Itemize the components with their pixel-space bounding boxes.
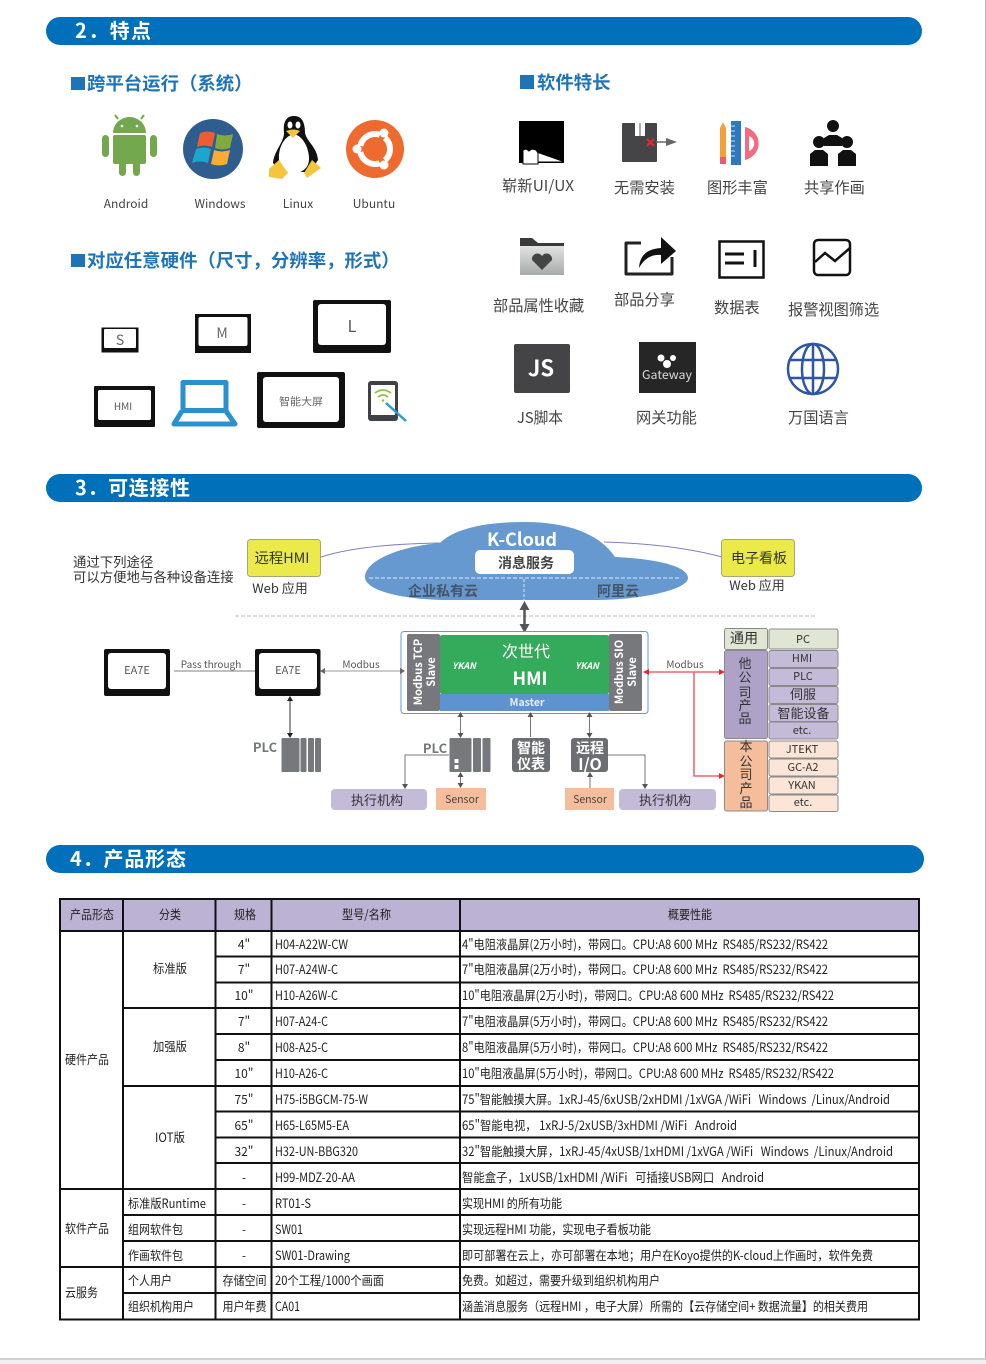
- column: spec: 7": [238, 961, 250, 978]
- column: model: H04-A22W-CW: [275, 934, 348, 953]
- section bar: 2 features: 2．特点: [75, 15, 151, 44]
- column: description: 涵盖消息服务（远程HMI ，电子大屏）所需的【云存储空间+ 数据流量】的相关费用: [462, 1296, 868, 1315]
- label: globe: 万国语言: [788, 406, 849, 428]
- HMI panel: [401, 632, 648, 714]
- column: category: 作画软件包: [128, 1245, 183, 1264]
- link: modbus tcp: [320, 656, 405, 674]
- column: category: 加强版: [153, 1036, 187, 1055]
- heading: cross platform: 跨平台运行（系统）: [87, 70, 253, 96]
- column: description: 8"电阻液晶屏(5万小时)，带网口。CPU:A8 600 MHz RS485/RS232/RS422: [462, 1037, 828, 1056]
- table grid: [60, 899, 919, 1320]
- HMI panel: Modbus SIO: [611, 640, 627, 704]
- column: model: H32-UN-BBG320: [275, 1141, 358, 1160]
- digital signage box: Web 应用: [729, 575, 785, 594]
- column: form: 硬件产品: [65, 1049, 109, 1068]
- remote HMI box: [248, 540, 320, 597]
- column: description: [462, 934, 893, 1315]
- device list: 通用: [730, 628, 758, 648]
- remote IO: I/O: [578, 751, 602, 775]
- column: description: 实现HMI 的所有功能: [462, 1193, 562, 1212]
- column: spec: 75": [234, 1091, 254, 1108]
- table header: 产品形态: [70, 904, 114, 923]
- icon: no install: [622, 123, 677, 162]
- icon: JS: JS: [528, 351, 554, 383]
- HMI panel: YKAN: [575, 659, 600, 672]
- heading: any hardware: 对应任意硬件（尺寸，分辨率，形式）: [87, 247, 400, 273]
- icon: share: [626, 237, 676, 274]
- column: description: 32"智能触摸大屏，1xRJ-45/4xUSB/1xHDMI /1xVGA /WiFi Windows /Linux/Android: [462, 1141, 893, 1160]
- column: spec: 4": [238, 936, 250, 953]
- platform labels: Android: [104, 195, 148, 212]
- column: model: H10-A26-C: [275, 1063, 328, 1082]
- device list: 伺服: [790, 684, 816, 703]
- platform labels: Linux: [283, 195, 313, 212]
- EA7E left: EA7E: [124, 662, 150, 678]
- device list: 公: [739, 751, 753, 770]
- EA7E left: [104, 649, 170, 696]
- device S: [102, 328, 138, 352]
- actuator left: [331, 789, 427, 810]
- platform labels: Windows: [194, 195, 246, 212]
- arrow: EA7E to PLC: [287, 696, 293, 738]
- arrowheads: [402, 712, 648, 789]
- digital signage box: [722, 540, 794, 594]
- column: description: 智能盒子，1xUSB/1xHDMI /WiFi 可插接USB网口 Android: [462, 1167, 764, 1186]
- column: category: 个人用户: [128, 1270, 172, 1289]
- device list: GC-A2: [788, 759, 818, 775]
- remote IO: [571, 738, 608, 775]
- icon: Ubuntu: [346, 120, 404, 178]
- sensor left: Sensor: [445, 792, 480, 807]
- device list: PLC: [793, 668, 813, 684]
- table header: [60, 899, 919, 931]
- device list: JTEKT: [786, 741, 819, 757]
- device list: 品: [738, 708, 752, 727]
- device list: etc.: [793, 722, 811, 738]
- column: description: 实现远程HMI 功能，实现电子看板功能: [462, 1219, 651, 1238]
- column: form: 软件产品: [65, 1218, 109, 1237]
- label: alarm chart: 报警视图筛选: [788, 298, 879, 320]
- connector lines to cloud: [321, 542, 722, 557]
- smart meter: 仪表: [517, 754, 545, 774]
- column: description: 4"电阻液晶屏(2万小时)，带网口。CPU:A8 600 MHz RS485/RS232/RS422: [462, 934, 828, 953]
- HMI panel: Slave: [423, 657, 439, 687]
- column: description: 7"电阻液晶屏(5万小时)，带网口。CPU:A8 600 MHz RS485/RS232/RS422: [462, 1011, 828, 1030]
- icon: rich graphics: [720, 121, 759, 165]
- icon: laptop: [174, 382, 235, 424]
- sensor right: Sensor: [573, 792, 608, 807]
- column: spec: -: [242, 1247, 246, 1264]
- column: model: RT01-S: [275, 1193, 311, 1212]
- PLC centre: PLC: [423, 738, 448, 757]
- column: model: SW01: [275, 1219, 303, 1238]
- section bar: 3 connectivity: [46, 472, 922, 502]
- column: description: 10"电阻液晶屏(5万小时)，带网口。CPU:A8 600 MHz RS485/RS232/RS422: [462, 1063, 834, 1082]
- device S: S: [116, 330, 124, 350]
- column: spec: 10": [234, 987, 254, 1004]
- actuator right: [619, 789, 716, 810]
- smart meter: [512, 738, 550, 774]
- label: rich graphics: 图形丰富: [707, 176, 768, 198]
- remote HMI box: Web 应用: [252, 578, 308, 597]
- PLC centre: [423, 738, 490, 772]
- label: JS: JS脚本: [517, 406, 563, 428]
- icon: favorite folder: [520, 238, 564, 275]
- cloud: K-Cloud: 消息服务: [498, 553, 554, 573]
- section bar: 3 connectivity: 3．可连接性: [75, 472, 190, 501]
- icon: data table: [720, 242, 764, 278]
- device L: L: [348, 313, 357, 337]
- device list: 智能设备: [777, 703, 830, 722]
- device list: etc.: [794, 794, 812, 810]
- EA7E right: [255, 649, 320, 696]
- intro text: 通过下列途径: [73, 551, 153, 571]
- cloud: K-Cloud: K-Cloud: [487, 526, 557, 552]
- sensor left: [436, 788, 486, 810]
- HMI panel: HMI: [513, 665, 547, 691]
- label: data table: 数据表: [714, 296, 760, 318]
- column: model: H07-A24-C: [275, 1011, 328, 1030]
- HMI panel: Master: [509, 695, 545, 710]
- column: model: H65-L65M5-EA: [275, 1115, 349, 1134]
- device list: 他: [738, 653, 752, 672]
- device smart screen: 智能大屏: [279, 394, 323, 409]
- column: form: [65, 1049, 109, 1301]
- section bar: 4 product forms: [46, 843, 924, 873]
- column: spec: -: [242, 1221, 246, 1238]
- cloud: K-Cloud: 企业私有云: [408, 581, 478, 601]
- device smart screen: [257, 372, 345, 428]
- column: model: H08-A25-C: [275, 1037, 328, 1056]
- smart meter: 智能: [517, 738, 545, 758]
- device list: 公: [738, 667, 752, 686]
- column: model: H07-A24W-C: [275, 959, 338, 978]
- icon: gateway: Gateway: [642, 366, 693, 383]
- column: spec: 7": [238, 1013, 250, 1030]
- column: category: 组织机构用户: [128, 1296, 194, 1315]
- table header: 型号/名称: [342, 904, 391, 923]
- connector arrows under HMI: [405, 716, 645, 789]
- HMI panel: YKAN: [452, 659, 477, 672]
- device list: YKAN: [787, 777, 816, 793]
- digital signage box: 电子看板: [731, 548, 787, 568]
- device list: 产: [739, 778, 753, 797]
- column: description: 75"智能触摸大屏。1xRJ-45/6xUSB/2xHDMI /1xVGA /WiFi Windows /Linux/Android: [462, 1089, 890, 1108]
- icon: JS: [514, 344, 570, 393]
- column: form: 云服务: [65, 1282, 98, 1301]
- arrow: cloud to HMI: [520, 601, 530, 633]
- device list: 司: [739, 764, 753, 783]
- column: description: 即可部署在云上，亦可部署在本地；用户在Koyo提供的K-cloud上作画时，软件免费: [462, 1245, 873, 1264]
- EA7E right: EA7E: [275, 662, 301, 678]
- device list: [724, 628, 838, 812]
- red modbus arrows: Modbus: [666, 656, 704, 671]
- device list: PC: [796, 631, 810, 647]
- column: spec: 10": [234, 1065, 254, 1082]
- column: category: IOT版: [155, 1127, 185, 1146]
- label: favorite folder: 部品属性收藏: [493, 294, 584, 316]
- cloud: K-Cloud: 阿里云: [597, 581, 639, 601]
- device L: [313, 300, 391, 353]
- device M: [195, 314, 251, 353]
- device HMI: [94, 386, 155, 427]
- device list: 产: [738, 695, 752, 714]
- red modbus arrows: [643, 656, 725, 779]
- column: spec: 65": [234, 1117, 254, 1134]
- column: category: 标准版: [153, 958, 187, 977]
- device list: 品: [739, 792, 753, 811]
- table header: 规格: [234, 904, 256, 923]
- column: spec: -: [242, 1195, 246, 1212]
- label: new UI: 崭新UI/UX: [502, 174, 574, 196]
- PLC left: PLC: [253, 737, 278, 756]
- table header: 分类: [159, 904, 181, 923]
- device list: HMI: [792, 650, 812, 666]
- column: spec: -: [242, 1169, 246, 1186]
- platform labels: Ubuntu: [353, 195, 395, 212]
- label: gateway: 网关功能: [636, 406, 697, 428]
- HMI panel: 次世代: [502, 638, 550, 662]
- intro text: [73, 551, 234, 586]
- actuator right: 执行机构: [639, 790, 691, 809]
- icon: new UI: [519, 121, 564, 164]
- intro text: 可以方便地与各种设备连接: [73, 566, 234, 586]
- sensor right: [565, 788, 614, 810]
- column: model: SW01-Drawing: [275, 1245, 350, 1264]
- link: modbus tcp: Modbus: [342, 656, 380, 671]
- column: description: 10"电阻液晶屏(2万小时)，带网口。CPU:A8 600 MHz RS485/RS232/RS422: [462, 985, 834, 1004]
- column: spec: 用户年费: [222, 1296, 266, 1315]
- section bar: 2 features: [46, 15, 922, 45]
- platform labels: [104, 195, 395, 212]
- label: share: 部品分享: [614, 288, 675, 310]
- column: description: 65"智能电视， 1xRJ-5/2xUSB/3xHDMI /WiFi Android: [462, 1115, 737, 1134]
- link: pass through: Pass through: [181, 656, 241, 671]
- device HMI: HMI: [114, 398, 132, 413]
- column: model: [275, 934, 384, 1315]
- section bar: 4 product forms: 4．产品形态: [70, 843, 186, 872]
- column: model: CA01: [275, 1296, 300, 1315]
- icon: alarm chart: [814, 240, 850, 275]
- icon: tablet with wifi: [368, 381, 406, 421]
- device list: 司: [738, 682, 752, 701]
- icon: gateway: [639, 342, 696, 393]
- icon: shared drawing: [810, 120, 856, 166]
- HMI panel: Slave: [624, 657, 640, 687]
- column: spec: 32": [234, 1143, 254, 1160]
- label: no install: 无需安装: [614, 176, 675, 198]
- label: shared drawing: 共享作画: [804, 176, 865, 198]
- column: model: H75-i5BGCM-75-W: [275, 1089, 368, 1108]
- column: description: 免费。如超过，需要升级到组织机构用户: [462, 1270, 660, 1289]
- icon: Linux penguin: [269, 116, 321, 179]
- column: description: 7"电阻液晶屏(2万小时)，带网口。CPU:A8 600 MHz RS485/RS232/RS422: [462, 959, 828, 978]
- table header: 概要性能: [668, 904, 712, 923]
- PLC left: [253, 737, 321, 772]
- column: model: H99-MDZ-20-AA: [275, 1167, 355, 1186]
- table: products: [60, 899, 919, 1320]
- column: model: H10-A26W-C: [275, 985, 338, 1004]
- cloud: K-Cloud: [365, 522, 688, 602]
- icon: globe: [788, 344, 838, 394]
- actuator left: 执行机构: [351, 790, 403, 809]
- device list: 本: [739, 736, 753, 755]
- column: spec: 8": [238, 1039, 250, 1056]
- column: category: [128, 958, 206, 1315]
- remote HMI box: 远程HMI: [254, 548, 310, 568]
- remote IO: 远程: [576, 738, 604, 758]
- column: category: 组网软件包: [128, 1219, 183, 1238]
- column: category: 标准版Runtime: [128, 1193, 206, 1212]
- device M: M: [216, 323, 228, 343]
- column: spec: [222, 936, 266, 1315]
- heading: software features: 软件特长: [537, 69, 611, 95]
- icon: Android: [102, 115, 157, 176]
- HMI panel: Modbus TCP: [410, 639, 426, 705]
- column: model: 20个工程/1000个画面: [275, 1270, 384, 1289]
- column: spec: 存储空间: [222, 1270, 266, 1289]
- icon: Windows: [183, 119, 243, 179]
